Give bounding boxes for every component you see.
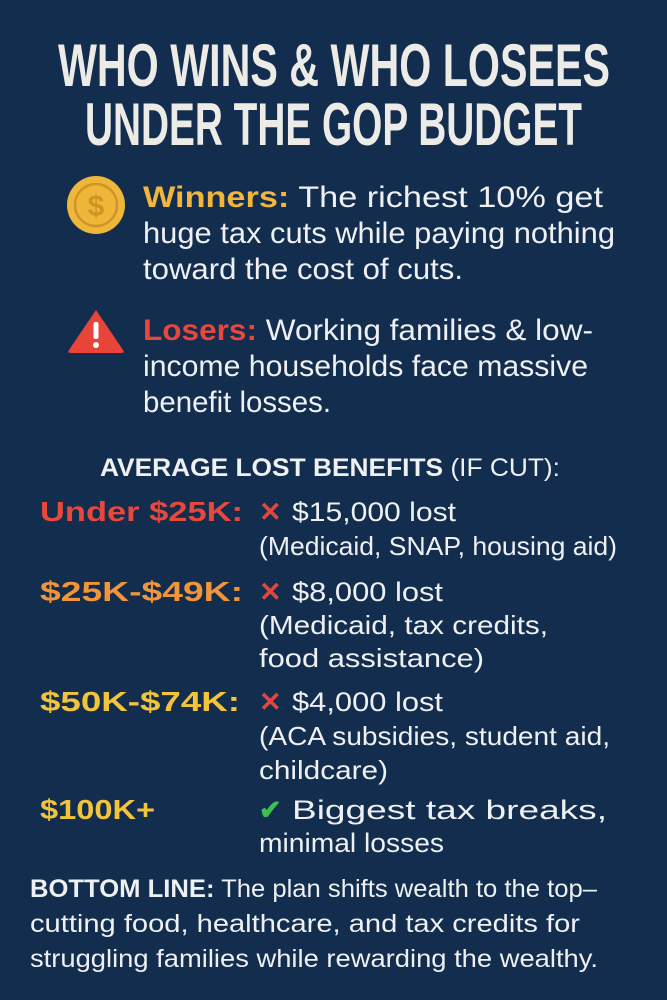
row: 100K+: $100K+ [40,794,155,825]
row: 100K+: ✔ [259,795,282,825]
row: 25K-49K: (Medicaid, tax credits, [259,610,548,640]
row: 100K+ [40,794,607,858]
row: under 25K [40,496,617,561]
icon: coin [67,176,125,234]
winners text: Winners: The richest 10% get [143,181,604,214]
row: under 25K: ✕ [259,497,282,527]
losers text: income households face massive [143,350,588,383]
bottom line: cutting food, healthcare, and tax credits for [30,910,580,938]
losers text [143,314,593,419]
bottom line: BOTTOM LINE: The plan shifts wealth to the top– [30,875,597,903]
losers text: Losers: Working families & low- [143,314,593,347]
row: 50K-74K: $4,000 lost [292,687,444,717]
row: 25K-49K: $25K-$49K: [40,576,243,607]
section heading: AVERAGE LOST BENEFITS (IF CUT): [100,454,560,482]
row: under 25K: Under $25K: [40,496,243,527]
row: 50K-74K: $50K-$74K: [40,686,240,717]
icon: warning triangle [68,310,124,353]
row: 50K-74K: childcare) [259,755,388,785]
row: 25K-49K: $8,000 lost [292,577,444,607]
row: 25K-49K: ✕ [259,577,282,607]
losers text: benefit losses. [143,386,331,419]
bottom line: struggling families while rewarding the wealthy. [30,945,598,973]
row: 50K-74K: ✕ [259,687,282,717]
winners text [143,181,615,286]
row: 100K+: Biggest tax breaks, [292,795,607,825]
winners block [67,176,615,286]
row: 100K+: minimal losses [259,828,444,858]
row: under 25K: $15,000 lost [292,497,457,527]
row: under 25K: (Medicaid, SNAP, housing aid) [259,531,617,561]
row: 50K-74K [40,686,610,785]
icon: coin: $ [88,190,105,223]
bottom line [30,875,598,973]
row: 25K-49K: food assistance) [259,643,484,673]
winners text: toward the cost of cuts. [143,253,463,286]
losers block [68,310,593,419]
title [58,32,610,158]
winners text: huge tax cuts while paying nothing [143,217,615,250]
row: 25K-49K [40,576,548,673]
row: 50K-74K: (ACA subsidies, student aid, [259,721,610,751]
